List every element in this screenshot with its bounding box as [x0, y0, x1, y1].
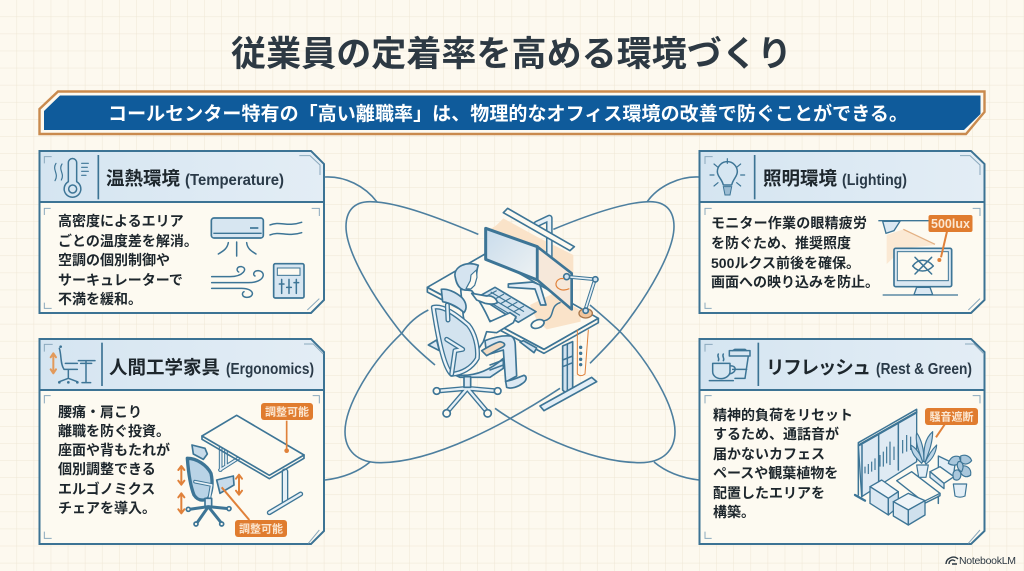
- heading: 人間工学家具: [109, 357, 220, 378]
- partition: [855, 409, 917, 501]
- badge: 500lux: 500lux: [931, 217, 970, 231]
- heading: 照明環境: [763, 168, 838, 189]
- badge: 調整可能 bottom: [235, 520, 287, 537]
- right armchair: [930, 456, 955, 489]
- armchair front: [893, 493, 925, 525]
- text block: 画面への映り込みを防止。: [711, 274, 879, 290]
- light bar and pole: [503, 208, 574, 257]
- backrest: [433, 307, 478, 374]
- heading: [109, 357, 314, 378]
- badge: 調整可能 top: 調整可能: [265, 404, 309, 418]
- icon: chair and desk: [44, 343, 323, 543]
- orbit ellipses: [345, 202, 675, 463]
- banner: [40, 92, 984, 134]
- palm plant: [911, 432, 937, 477]
- keyboard: [478, 287, 536, 322]
- text block: 配置したエリアを: [713, 485, 825, 501]
- lighting glow: [487, 218, 573, 277]
- chair base: [437, 388, 498, 412]
- text block: モニター作業の眼精疲労: [711, 215, 867, 231]
- text block: エルゴノミクス: [58, 481, 155, 497]
- text block: 500ルクス前後を確保。: [711, 255, 860, 271]
- armchair left: [870, 480, 898, 515]
- text block: チェアを導入。: [58, 500, 156, 516]
- head: [455, 264, 478, 290]
- badge: 騒音遮断: [925, 408, 978, 425]
- central illustration: employee at desk: [427, 208, 598, 417]
- torso and arm: [461, 289, 516, 357]
- monitor left: [486, 228, 537, 280]
- heading: (Lighting): [842, 172, 907, 189]
- text block: 届かないカフェス: [713, 446, 825, 462]
- text block: を防ぐため、推奨照度: [711, 235, 851, 251]
- monitor right: [537, 247, 572, 309]
- employee: [455, 264, 526, 388]
- text block: するため、通話音が: [713, 426, 839, 442]
- heading: [106, 168, 284, 189]
- panel: temperature: [40, 151, 324, 313]
- text block: 腰痛・肩こり: [58, 404, 142, 420]
- badge: 騒音遮断: 騒音遮断: [930, 410, 974, 424]
- text block: [713, 407, 853, 520]
- panel: lighting: [700, 151, 984, 313]
- text block: [711, 215, 879, 290]
- icon: light bulb: [705, 155, 980, 310]
- legs: [485, 336, 517, 382]
- text block: [58, 404, 170, 516]
- icon: thermometer: [44, 155, 320, 310]
- text block: 精神的負荷をリセット: [713, 407, 853, 423]
- illustration: adjustable desk: [178, 415, 304, 513]
- heading: (Ergonomics): [226, 361, 314, 378]
- connector lines: [325, 177, 699, 480]
- text block: サーキュレーターで: [58, 272, 183, 288]
- banner: コールセンター特有の「高い離職率」は、物理的なオフィス環境の改善で防ぐことができる。: [108, 102, 908, 125]
- heading: リフレッシュ: [766, 357, 871, 378]
- icon: air conditioner and airflow: [211, 218, 304, 298]
- desk leg: [540, 342, 597, 411]
- watermark: NotebookLM: NotebookLM: [959, 555, 1016, 567]
- armrests: [447, 339, 463, 374]
- illustration: rest area: [855, 409, 972, 525]
- text block: 不満を緩和。: [58, 291, 142, 307]
- icon: coffee cups: [705, 343, 984, 543]
- desk lamp: [556, 274, 598, 318]
- text block: 離職を防ぐ投資。: [58, 423, 170, 439]
- text block: 座面や背もたれが: [58, 442, 170, 458]
- illustration: ergonomic chair: [186, 445, 249, 526]
- text block: 個別調整できる: [58, 461, 156, 477]
- text block: ペースや観葉植物を: [713, 465, 838, 481]
- chair: [428, 289, 505, 417]
- text block: ごとの温度差を解消。: [58, 233, 198, 249]
- illustration: monitor and 500lux: [878, 221, 958, 295]
- panel: rest and green: [700, 339, 984, 544]
- mouse and cable: [530, 303, 560, 330]
- panel: ergonomics: [40, 339, 324, 544]
- monitor stand: [508, 282, 546, 305]
- desk: [427, 254, 598, 353]
- chair seat stack: [455, 358, 503, 377]
- text block: 高密度によるエリア: [58, 213, 184, 229]
- heading: (Temperature): [185, 172, 284, 189]
- heading: 温熱環境: [106, 168, 181, 189]
- heading: (Rest & Green): [876, 361, 972, 378]
- badge: 調整可能 bottom: 調整可能: [239, 522, 283, 536]
- badge: 調整可能 top: [261, 403, 313, 420]
- title: 従業員の定着率を高める環境づくり: [231, 35, 792, 74]
- text block: [58, 213, 198, 307]
- table: [897, 472, 940, 502]
- text block: 構築。: [713, 504, 755, 520]
- headrest: [441, 289, 466, 313]
- monstera plant: [948, 455, 972, 497]
- text block: 空調の個別制御や: [58, 252, 170, 268]
- heading: [763, 168, 907, 189]
- heading: [766, 357, 972, 378]
- chair side pad: [428, 340, 439, 351]
- cable tray: [577, 330, 588, 376]
